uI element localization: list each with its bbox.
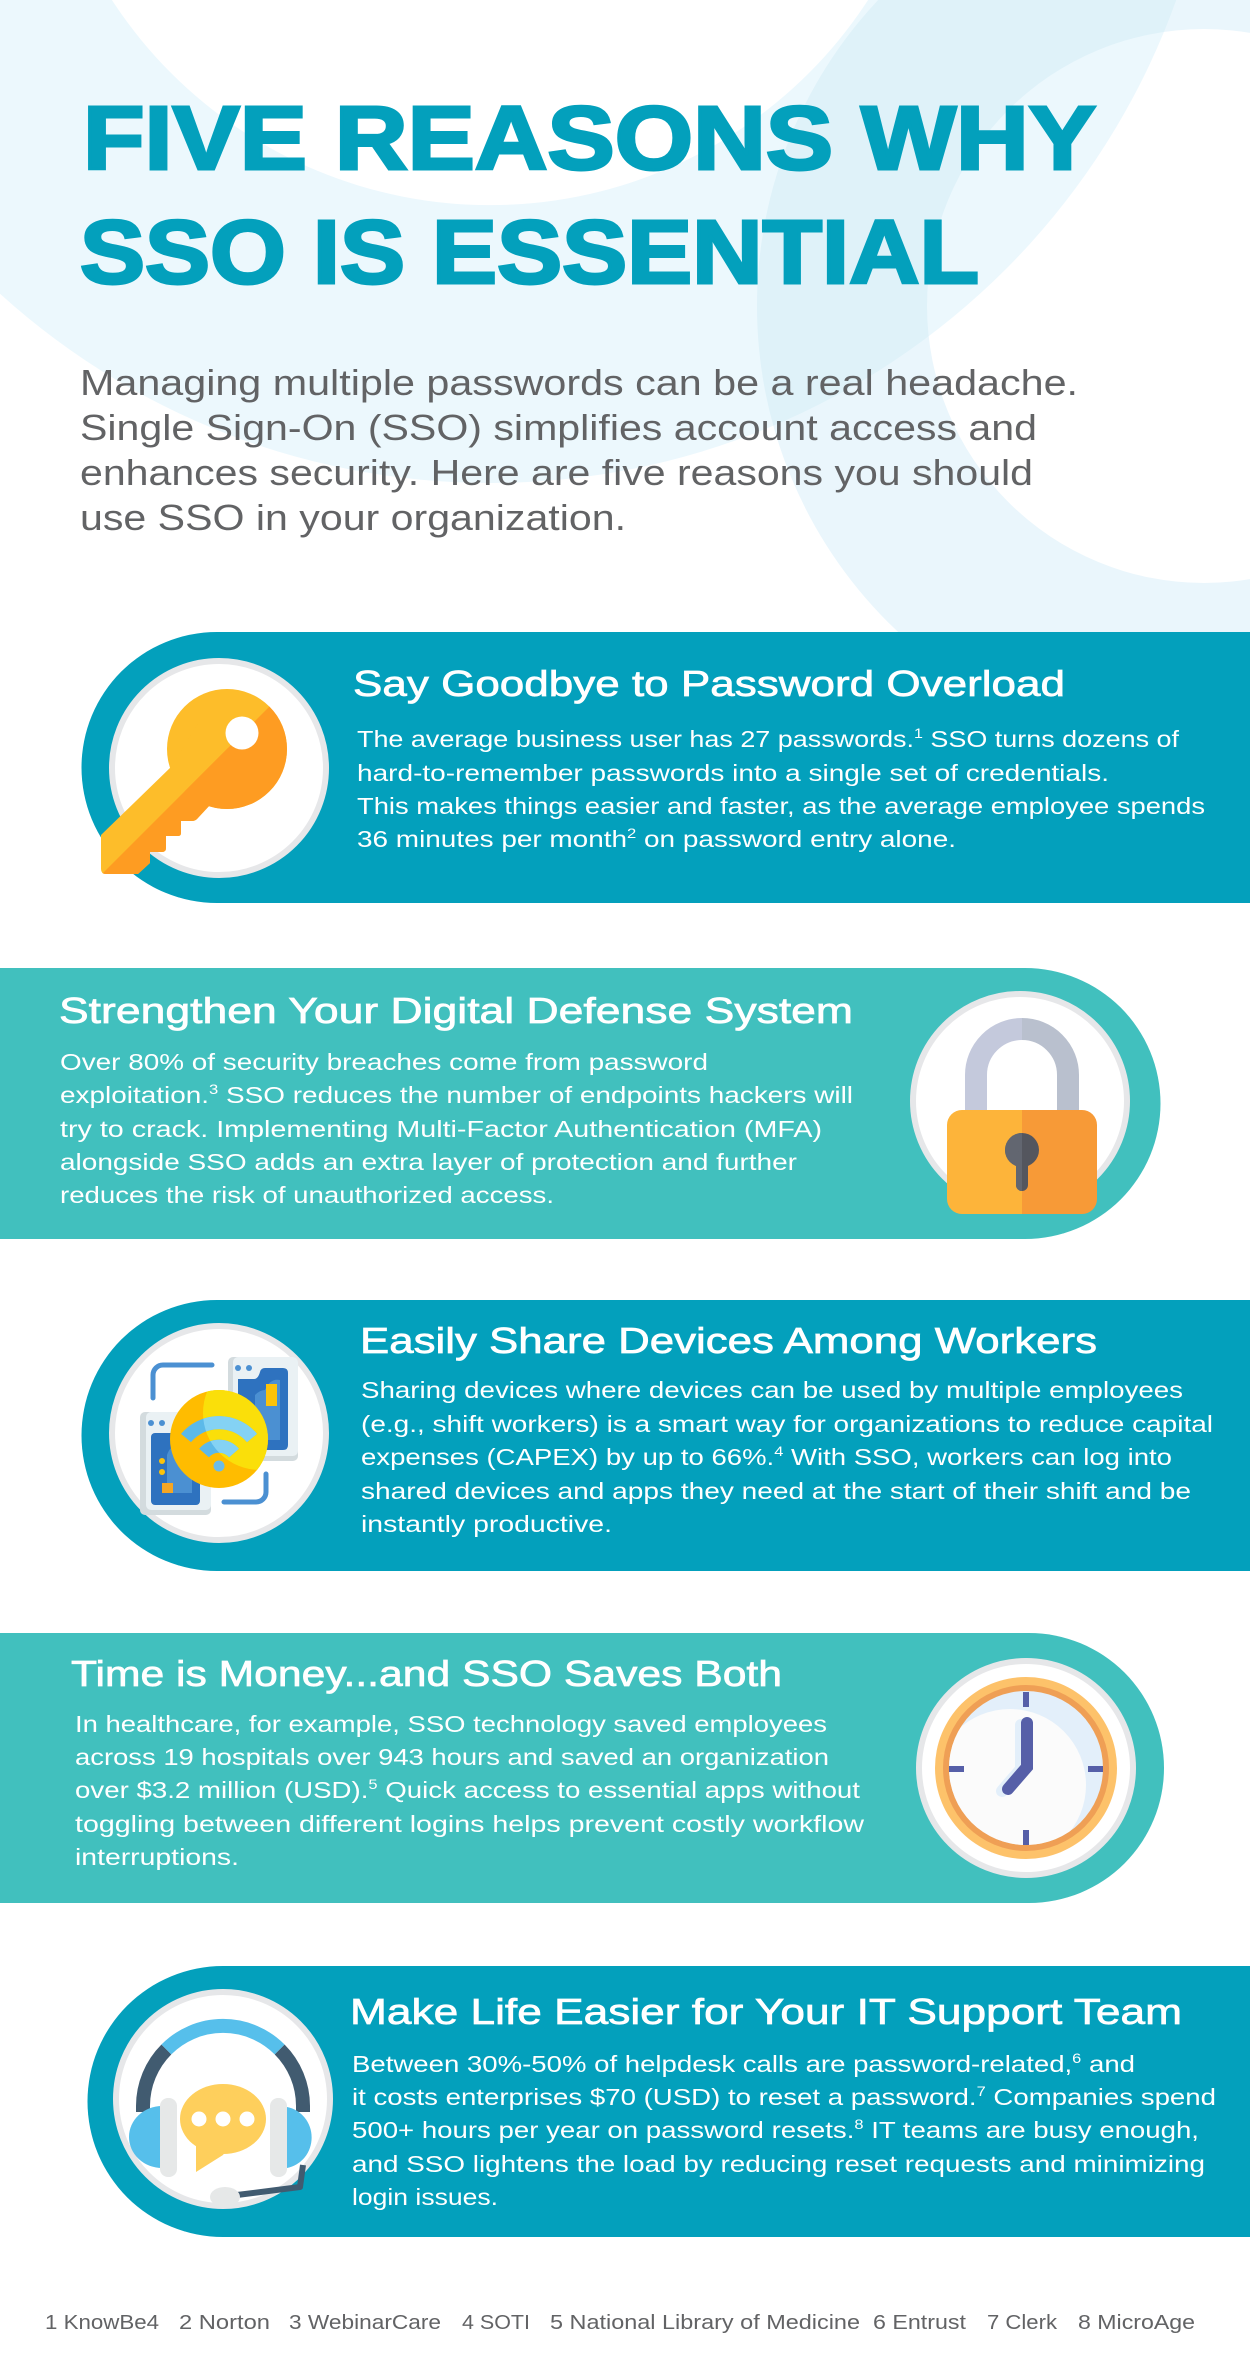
footer sources: 1 KnowBe4 [45, 2311, 159, 2334]
body: digital defense: exploitation. [60, 1082, 185, 1108]
body: IT support: 6 [1072, 2050, 1082, 2066]
title: SSO IS ESSENTIAL [80, 203, 979, 303]
icon ring: password overload [112, 661, 326, 875]
body: time is money: Quick access to essential apps without [378, 1777, 861, 1803]
intro text: Managing multiple passwords can be a real headache. [80, 362, 1078, 403]
icon ring: IT support [116, 1992, 330, 2206]
footer sources: 4 SOTI [462, 2311, 530, 2334]
footer sources: 5 National Library of Medicine [550, 2311, 860, 2334]
heading: digital defense: Strengthen Your Digital Defense System [59, 990, 853, 1031]
intro text: Single Sign-On (SSO) simplifies account access and [80, 407, 1037, 448]
body: password overload: This makes things easier and faster, as the average employee spends [357, 793, 1205, 819]
intro text: use SSO in your organization. [80, 497, 626, 538]
panel: time is money [0, 1633, 1164, 1903]
body: IT support: and SSO lightens the load by reducing reset requests and minimizing [352, 2151, 1205, 2177]
body: password overload: 36 minutes per month [357, 826, 584, 852]
icon: clock [934, 1677, 1117, 1861]
body: password overload: 2 [627, 825, 637, 841]
intro text [80, 362, 1078, 538]
footer sources: 6 Entrust [873, 2311, 966, 2334]
body: share devices: (e.g., shift workers) is a smart way for organizations to reduce capital [361, 1411, 1213, 1437]
body: digital defense [60, 1049, 853, 1208]
heading: IT support: Make Life Easier for Your IT Support Team [350, 1991, 1182, 2032]
heading: password overload: Say Goodbye to Password Overload [353, 663, 1065, 704]
body: time is money: 5 [368, 1776, 378, 1792]
body: time is money: In healthcare, for example, SSO technology saved employees [75, 1711, 827, 1737]
body: digital defense: SSO reduces the number of endpoints hackers will [218, 1082, 853, 1108]
panel: share devices [82, 1300, 1250, 1571]
body: digital defense: try to crack. Implementing Multi-Factor Authentication (MFA) [60, 1116, 822, 1142]
panel: password overload [82, 632, 1250, 903]
body: password overload: The average business user has 27 passwords. [357, 726, 843, 752]
body: share devices: With SSO, workers can log into [783, 1444, 1172, 1470]
body: share devices: 4 [774, 1443, 784, 1459]
panel: digital defense [0, 968, 1160, 1239]
body: time is money: toggling between different logins helps prevent costly workflow [75, 1811, 865, 1837]
body: IT support: IT teams are busy enough, [864, 2117, 1199, 2143]
icon: padlock [947, 1029, 1097, 1214]
body: password overload [357, 725, 1205, 852]
body: share devices: Sharing devices where devices can be used by multiple employees [361, 1377, 1183, 1403]
footer sources: 7 Clerk [987, 2311, 1058, 2334]
body: password overload: hard-to-remember passwords into a single set of credentials. [357, 760, 1109, 786]
body: IT support: 7 [977, 2083, 986, 2099]
body: time is money: across 19 hospitals over 943 hours and saved an organization [75, 1744, 829, 1770]
footer sources: 3 WebinarCare [289, 2311, 441, 2334]
heading: time is money: Time is Money...and SSO Saves Both [71, 1653, 782, 1694]
body: password overload: on password entry alone. [636, 826, 956, 852]
footer sources: 8 MicroAge [1078, 2311, 1195, 2334]
icon ring: digital defense [913, 994, 1127, 1208]
title [80, 89, 1096, 303]
icon: key [101, 689, 287, 874]
icon ring: share devices [112, 1326, 326, 1540]
body: IT support: login issues. [352, 2184, 498, 2210]
body: time is money: interruptions. [75, 1844, 239, 1870]
body: IT support: Companies spend [986, 2084, 1216, 2110]
footer sources: 2 Norton [179, 2311, 270, 2334]
body: IT support: 8 [854, 2116, 864, 2132]
body: digital defense: 3 [209, 1081, 219, 1097]
body: IT support: it costs enterprises $70 (USD) to reset a password. [352, 2084, 884, 2110]
footer sources [45, 2311, 1195, 2334]
panel: IT support [88, 1966, 1250, 2237]
body: digital defense: Over 80% of security breaches come from password [60, 1049, 708, 1075]
icon: shared devices with wifi [140, 1357, 298, 1515]
body: digital defense: alongside SSO adds an extra layer of protection and further [60, 1149, 797, 1175]
icon: headset with speech bubble [129, 2026, 312, 2207]
body: IT support: Between 30%-50% of helpdesk calls are password-related, [352, 2051, 966, 2077]
icon ring: time is money [919, 1661, 1133, 1875]
heading: share devices: Easily Share Devices Among Workers [360, 1320, 1097, 1361]
body: share devices: expenses (CAPEX) by up to 66%. [361, 1444, 714, 1470]
body: share devices [361, 1377, 1213, 1537]
body: IT support: 500+ hours per year on password resets. [352, 2117, 780, 2143]
body: digital defense: reduces the risk of unauthorized access. [60, 1182, 554, 1208]
body: time is money: over $3.2 million (USD). [75, 1777, 324, 1803]
body: IT support: and [1081, 2051, 1135, 2077]
body: share devices: shared devices and apps they need at the start of their shift and be [361, 1478, 1191, 1504]
body: IT support [352, 2050, 1216, 2210]
body: password overload: SSO turns dozens of [923, 726, 1180, 752]
title: FIVE REASONS WHY [83, 89, 1096, 189]
body: password overload: 1 [914, 725, 923, 741]
body: share devices: instantly productive. [361, 1511, 612, 1537]
intro text: enhances security. Here are five reasons you should [80, 452, 1033, 493]
body: time is money [75, 1711, 865, 1870]
